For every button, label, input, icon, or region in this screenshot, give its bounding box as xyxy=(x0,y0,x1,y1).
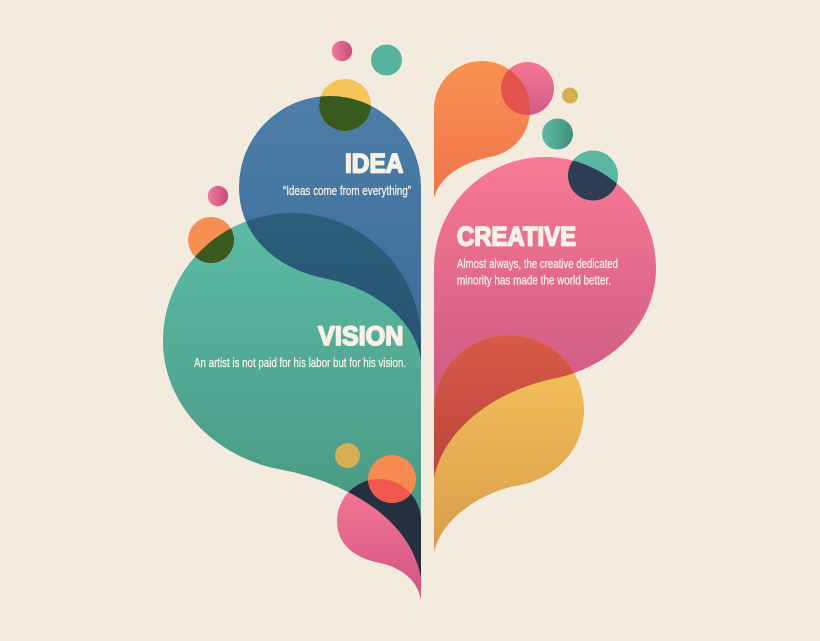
heading: creative: CREATIVE xyxy=(457,222,576,252)
creative quote: Almost always, the creative dedicated xyxy=(457,256,618,271)
icon: orange circle on vision petal xyxy=(188,217,234,263)
heading: vision: VISION xyxy=(318,321,404,351)
pink drop petal xyxy=(337,479,421,600)
idea quote: “Ideas come from everything” xyxy=(283,183,411,198)
icon: pink circle on orange petal xyxy=(501,62,554,115)
icon: small yellow dot right xyxy=(562,88,578,104)
text block: creative xyxy=(457,222,618,288)
creative quote: minority has made the world better. xyxy=(457,272,611,288)
icon: green circle on creative petal xyxy=(568,150,618,200)
panel: creative petal xyxy=(434,157,656,478)
icon: small pink dot left xyxy=(208,186,228,206)
vision quote: An artist is not paid for his labor but for his vision. xyxy=(194,355,406,370)
text block: vision xyxy=(194,321,406,370)
orange drop petal xyxy=(434,61,530,198)
icon: small pink dot top xyxy=(332,41,352,61)
panel: vision petal xyxy=(163,213,421,518)
icon: yellow circle on idea petal xyxy=(319,79,371,131)
icon: green dot top xyxy=(371,44,402,76)
icon: yellow dot on vision petal xyxy=(335,443,360,468)
panel: idea petal xyxy=(239,96,421,360)
yellow petal xyxy=(434,335,584,553)
heading: idea: IDEA xyxy=(345,148,404,178)
icon: orange circle on vision petal bottom xyxy=(368,455,416,503)
icon: green dot right xyxy=(542,118,573,150)
text block: idea xyxy=(283,148,411,198)
